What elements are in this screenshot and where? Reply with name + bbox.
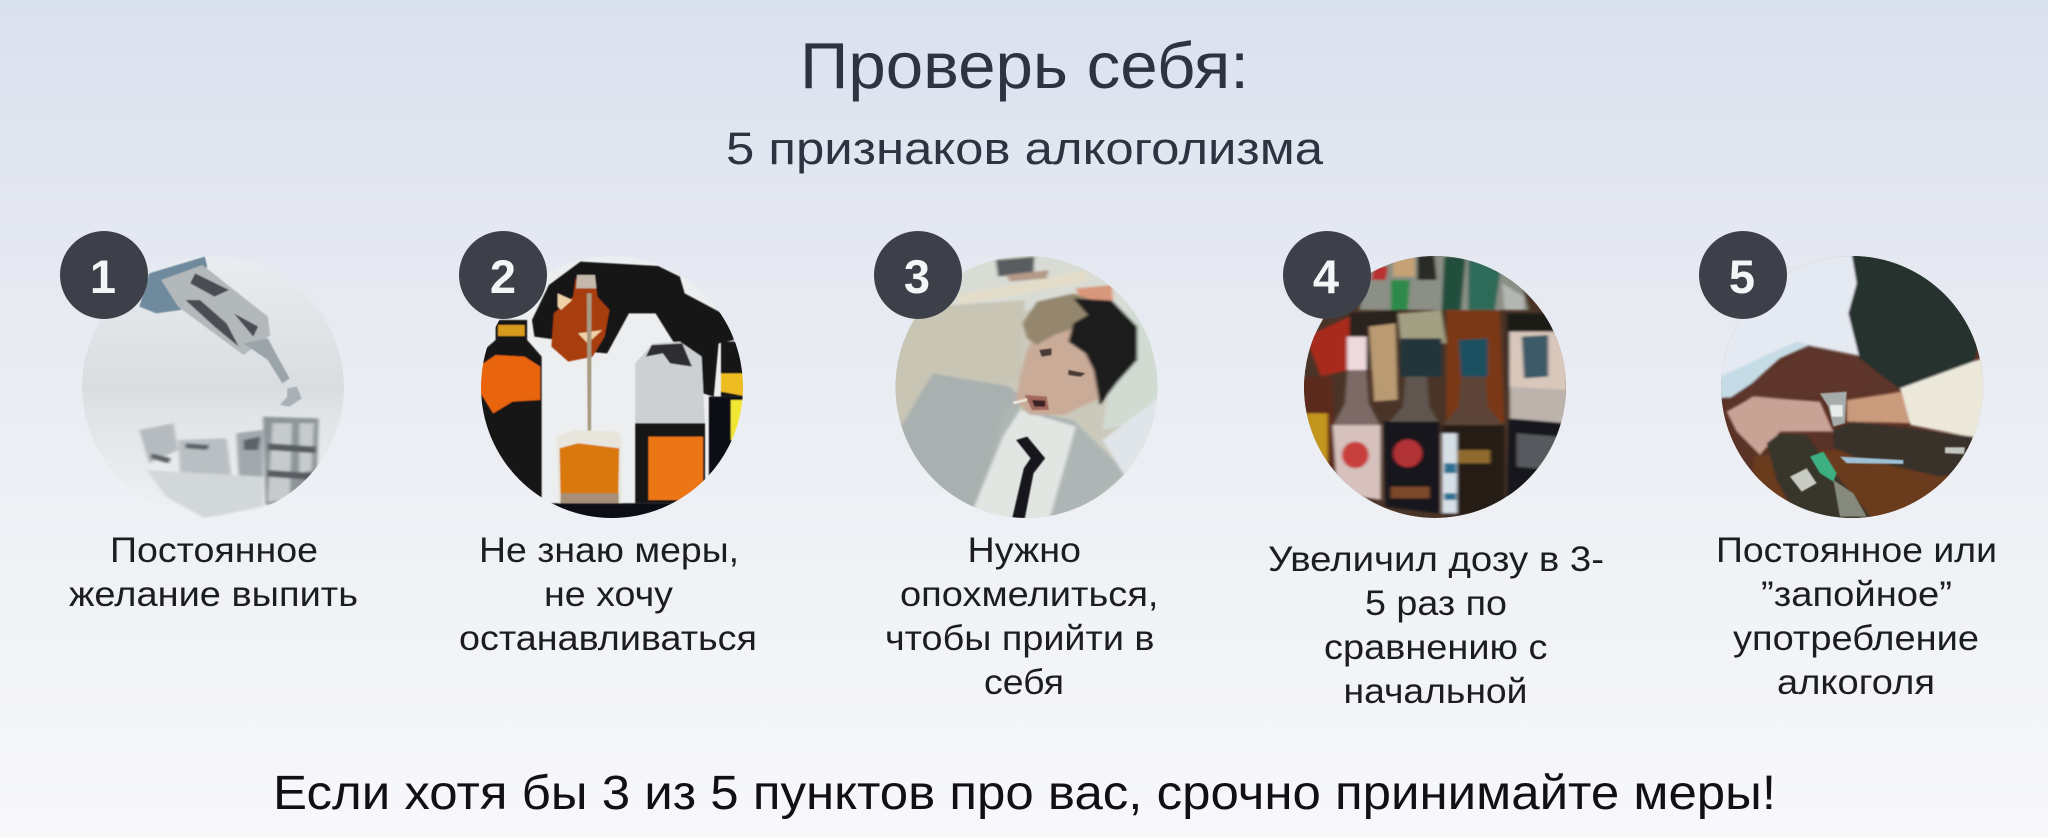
label 4: сравнению с (1324, 627, 1548, 667)
label 1: желание выпить (69, 574, 358, 614)
panel: sign 5 (1699, 231, 1997, 702)
number badge 3 (874, 231, 962, 319)
label 5 (1716, 530, 1997, 702)
panel: sign 3 (874, 231, 1161, 702)
label 2 (459, 530, 757, 658)
photo: rows of whiskey bottles (1301, 253, 1568, 518)
label 5: алкоголя (1777, 662, 1935, 702)
label 2: Не знаю меры, (479, 530, 739, 570)
label 3: себя (984, 662, 1064, 702)
photo: pouring vodka over ice (82, 256, 344, 518)
panel: sign 4 (1268, 231, 1604, 711)
photo: bottles and poured glass (481, 260, 743, 518)
number badge 3: 3 (904, 250, 930, 303)
label 4: Увеличил дозу в 3- (1268, 539, 1604, 579)
number badge 1: 1 (90, 250, 116, 303)
label 1: Постоянное (110, 530, 318, 570)
photo: man passed out with bottles (1721, 256, 1983, 518)
number badge 4: 4 (1313, 250, 1339, 303)
photo: hungover man in grey suit (889, 253, 1161, 520)
number badge 2 (459, 231, 547, 319)
call to action: Если хотя бы 3 из 5 пунктов про вас, срочно принимайте меры! (273, 767, 1776, 820)
number badge 1 (60, 231, 148, 319)
label 3: опохмелиться, (900, 574, 1158, 614)
number badge 5: 5 (1729, 250, 1755, 303)
title: Проверь себя: (800, 29, 1249, 102)
panel: sign 2 (459, 231, 767, 658)
label 2: останавливаться (459, 618, 757, 658)
label 2: не хочу (544, 574, 673, 614)
label 5: ”запойное” (1761, 574, 1952, 614)
label 3 (885, 530, 1158, 702)
subtitle: 5 признаков алкоголизма (726, 123, 1324, 174)
label 3: чтобы прийти в (885, 618, 1154, 658)
number badge 2: 2 (490, 250, 516, 303)
label 3: Нужно (968, 530, 1081, 570)
panel: sign 1 (60, 231, 358, 614)
number badge 4 (1283, 231, 1371, 319)
label 4: 5 раз по (1365, 583, 1507, 623)
label 5: употребление (1733, 618, 1979, 658)
label 1 (69, 530, 358, 614)
label 5: Постоянное или (1716, 530, 1997, 570)
label 4 (1268, 539, 1604, 711)
number badge 5 (1699, 231, 1787, 319)
label 4: начальной (1344, 671, 1528, 711)
